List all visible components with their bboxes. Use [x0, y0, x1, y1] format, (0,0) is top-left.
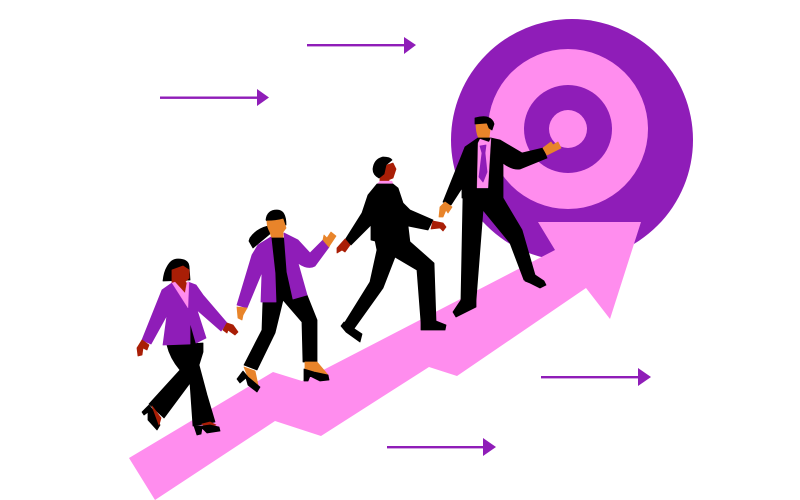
arrow: top centre — [307, 37, 416, 54]
arrow: lower centre — [387, 438, 496, 456]
arrow: rising pink growth arrow — [129, 222, 641, 500]
figure: lead man pointing at target — [439, 117, 561, 317]
arrow: top left — [160, 89, 269, 106]
icon: target — [451, 19, 693, 261]
figure: first woman in purple jacket — [137, 259, 238, 435]
figure: second woman with ponytail — [237, 210, 336, 392]
arrow: lower right — [541, 368, 651, 386]
figure: third person, man in black suit — [337, 157, 446, 342]
